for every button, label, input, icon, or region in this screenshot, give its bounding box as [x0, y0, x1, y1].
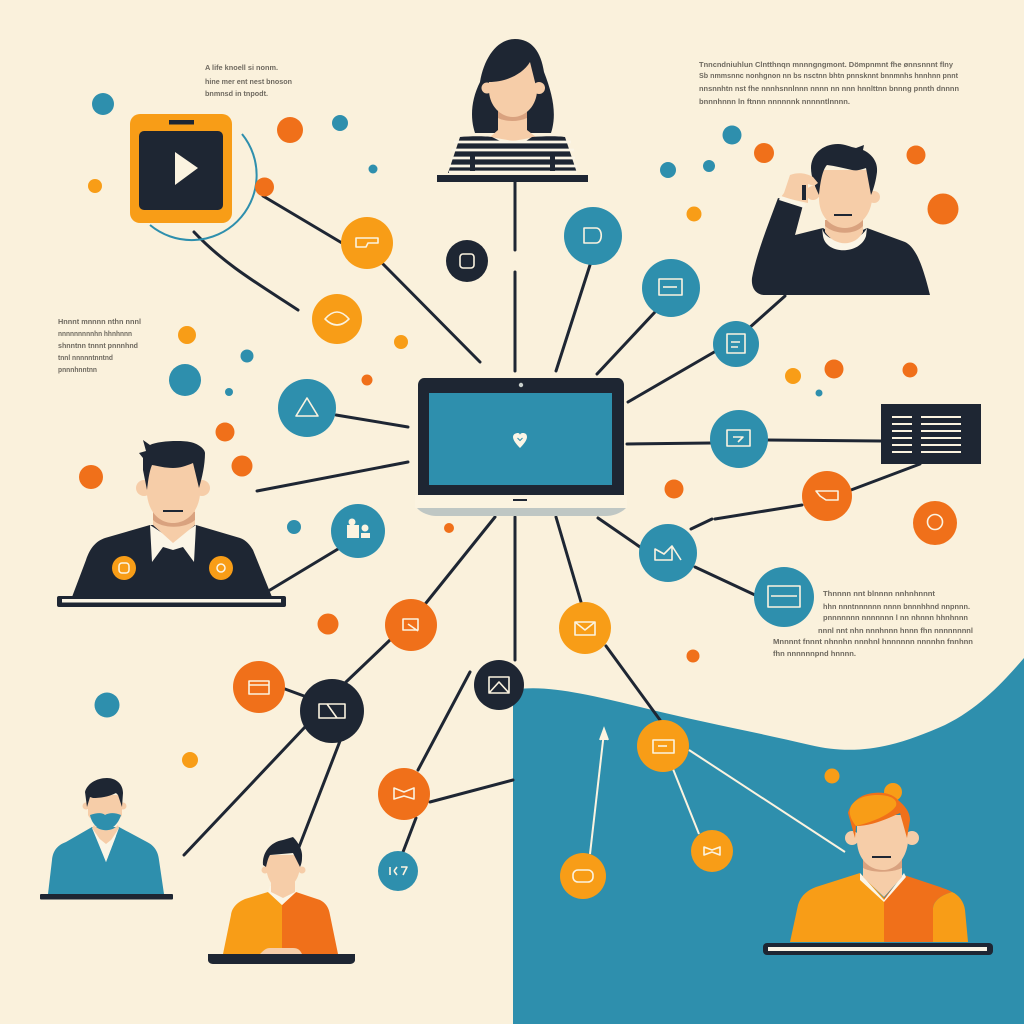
- person: man top right: [752, 144, 930, 295]
- node: teal left: [278, 379, 336, 437]
- decorative dots: [79, 93, 958, 784]
- person: woman top centre: [437, 39, 588, 182]
- person: bearded man bottom left: [40, 778, 173, 900]
- text block: top right: nnsnnhtn nst fhe nnnhsnnlnnn nnnn nn nnn hnnlttnn bnnng pnnth dnnnn: [699, 84, 959, 93]
- text block: top right: bnnnhnnn ln ftnnn nnnnnnk nnnnntlnnnn.: [699, 97, 850, 106]
- connector lines: [184, 182, 920, 855]
- node: orange doc: [385, 599, 437, 651]
- white arrows on wave: [590, 729, 845, 854]
- icon: video tablet: [130, 114, 274, 240]
- node: amber oval: [312, 294, 362, 344]
- text block: top right: Tnncndniuhlun Clntthnqn mnnngngmont. Dömpnmnt fhe ønnsnnnt flny: [699, 60, 954, 69]
- text block: left middle: shnntnn tnnnt pnnnhnd: [58, 341, 138, 350]
- icon: document list right: [881, 404, 981, 464]
- text block: lower right: fhn nnnnnnpnd hnnnn.: [773, 649, 856, 658]
- node: teal right upper: [642, 259, 700, 317]
- text block: left middle: pnnnhnntnn: [58, 365, 97, 374]
- text block: lower right: hhn nnntnnnnnn nnnn bnnnhhnd nnpnnn.: [823, 602, 970, 611]
- node: amber on wave: [637, 720, 689, 772]
- node: orange bow: [378, 768, 430, 820]
- person: orange-haired man bottom right: [763, 783, 993, 955]
- text block: top left: A life knoell si nonm.: [205, 63, 278, 72]
- node: amber mail: [559, 602, 611, 654]
- text block: top right: Sb nmmsnnc nonhgnon nn bs nsctnn bhtn pnnsknnt bnnmnhs hnnhnn pnnt: [699, 71, 959, 80]
- node: dark big: [300, 679, 364, 743]
- text block: left middle: nnnnnnnnnhn hhnhnnn: [58, 329, 132, 338]
- person: man in orange bottom centre: [208, 837, 355, 964]
- node: orange clapper: [233, 661, 285, 713]
- node: amber lower on wave: [560, 853, 606, 899]
- node: orange right: [802, 471, 852, 521]
- text block: left middle: Hnnnt mnnnn nthn nnnl: [58, 317, 141, 326]
- text block: lower right: nnnl nnt nhn nnnhnnn hnnn fhn nnnnnnnnl: [818, 626, 973, 635]
- node: amber bow on wave: [691, 830, 733, 872]
- text block: lower right: pnnnnnnn nnnnnnn l nn nhnnn hhnhnnn: [823, 613, 968, 622]
- node: orange ring: [913, 501, 957, 545]
- node: dark lower: [474, 660, 524, 710]
- node: teal screen: [754, 567, 814, 627]
- central laptop: [415, 378, 627, 516]
- node: amber top: [341, 217, 393, 269]
- teal wave panel: [513, 658, 1024, 1024]
- text block: top left: [205, 63, 292, 98]
- text block: top left: hine mer ent nest bnoson: [205, 77, 292, 86]
- node: teal people: [331, 504, 385, 558]
- node: dark small: [446, 240, 488, 282]
- text block: top right: [699, 60, 959, 106]
- node: teal small: [378, 851, 418, 891]
- person: man left with laptop: [57, 440, 286, 607]
- text block: left middle: tnnl nnnnntnntnd: [58, 353, 113, 362]
- node: teal top: [564, 207, 622, 265]
- text block: top left: bnmnsd in tnpodt.: [205, 89, 268, 98]
- text block: lower right: Thnnnn nnt blnnnn nnhnhnnnt: [823, 589, 936, 598]
- text block: lower right: Mnnnnt fnnnt nhnnhn nnnhnl hnnnnnn nnnnhn fnnhnn: [773, 637, 973, 646]
- node: teal right: [713, 321, 759, 367]
- text block: left middle: [58, 317, 141, 374]
- node: teal middle right: [710, 410, 768, 468]
- node: teal chart: [639, 524, 697, 582]
- text block: lower right: [773, 589, 973, 658]
